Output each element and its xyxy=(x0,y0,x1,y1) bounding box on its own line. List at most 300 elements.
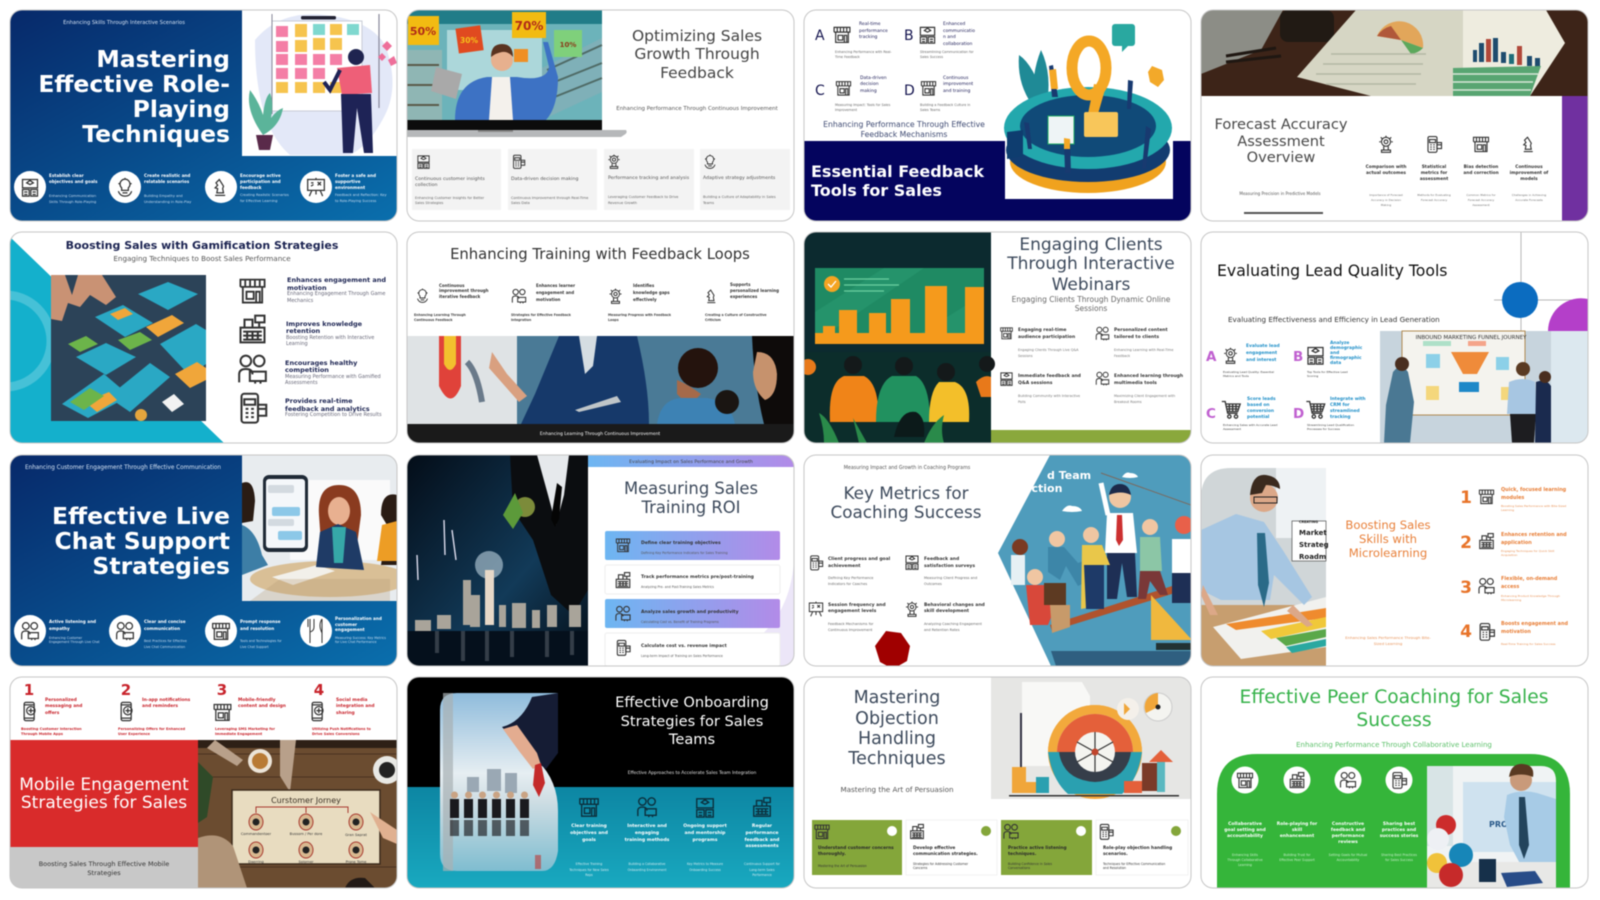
numbered feature row: and reminders xyxy=(142,703,178,709)
caption band: Enhancing Learning Through Continuous Improvement xyxy=(540,431,660,437)
title: Strategies for Sales xyxy=(21,793,187,813)
feature grid: Analyzing Coaching Engagement xyxy=(924,622,983,626)
panel: Effective Onboarding Strategies for Sales Teams xyxy=(407,677,794,888)
feature row: Clear and concise xyxy=(144,619,186,624)
feature columns: training methods xyxy=(625,837,670,843)
panel: Key Metrics for Coaching Success xyxy=(804,455,1193,669)
subtitle: Enhancing Sales Performance Through Bite- xyxy=(1345,635,1431,640)
feature grid A-D: based on xyxy=(1247,402,1270,408)
feature columns: Long-term Sales xyxy=(749,868,775,872)
title: Optimizing Sales xyxy=(632,27,762,45)
feature list: Enhances engagement and xyxy=(287,276,386,284)
panel: Effective Live Chat Support Strategies xyxy=(10,455,410,666)
photo: customer journey on a table: Bussom / Per dore xyxy=(290,832,323,836)
feature grid A-D: Data-driven xyxy=(860,75,887,81)
feature grid: Enhancing Learning with Real-Time xyxy=(1114,348,1173,352)
numbered feature row: 4 xyxy=(314,681,324,699)
numbered list: 2 xyxy=(1460,533,1472,553)
feature columns: assessments xyxy=(745,843,779,849)
feature grid A-D: Evaluate lead xyxy=(1246,343,1280,349)
illustration: webinar audience and bar chart xyxy=(800,232,995,443)
feature grid: Q&A sessions xyxy=(1018,380,1053,386)
feature row xyxy=(14,615,386,649)
title: Growth Through xyxy=(634,45,760,63)
title: Effective Live xyxy=(52,502,230,530)
title: Tools for Sales xyxy=(811,181,942,200)
illustration: performance gauge xyxy=(991,677,1191,799)
feature columns: Accountability xyxy=(1337,858,1359,862)
feature columns: Role-playing for xyxy=(1277,821,1318,827)
feature columns: for Sales Success xyxy=(1385,858,1413,862)
feature row: Active listening and xyxy=(49,619,96,624)
subtitle: Evaluating Effectiveness and Efficiency in Lead Generation xyxy=(1228,315,1440,324)
feature cards: Teams xyxy=(702,201,714,205)
feature grid A-D: tracking xyxy=(1330,414,1351,420)
panel: Mobile Engagement Strategies for Sales xyxy=(10,677,401,888)
subtitle: Engaging Clients Through Dynamic Online xyxy=(1012,295,1171,304)
feature grid A-D: D xyxy=(904,83,915,99)
feature grid: achievement xyxy=(828,563,861,569)
feature columns: Effective Peer Support xyxy=(1279,858,1316,862)
feature row: Live Chat Support xyxy=(240,645,269,649)
subtitle: Boosting Sales Through Effective Mobile xyxy=(39,860,169,868)
feature columns: metrics for xyxy=(1421,170,1448,176)
subtitle: Enhancing Performance Through Effective xyxy=(823,120,985,129)
feature columns: Bias detection xyxy=(1464,164,1498,170)
numbered list: 4 xyxy=(1460,622,1472,642)
feature cards xyxy=(812,820,1188,875)
title: Evaluating Lead Quality Tools xyxy=(1217,261,1447,280)
feature grid xyxy=(1001,327,1183,404)
title: Playing xyxy=(133,95,230,123)
feature columns: skill xyxy=(1292,827,1303,833)
image: laptop with shop scene: 10% xyxy=(560,41,576,49)
illustration: cheering cartoon team xyxy=(998,455,1193,666)
subtitle: Engaging Techniques to Boost Sales Performance xyxy=(113,254,291,263)
photo: presenter and students xyxy=(407,336,794,424)
feature columns: engaging xyxy=(635,830,659,836)
feature columns: and correction xyxy=(1463,170,1499,176)
subtitle: Effective Approaches to Accelerate Sales Team Integration xyxy=(628,770,756,776)
subtitle: Sessions xyxy=(1075,304,1107,313)
feature row: Enhancing Learning Through xyxy=(414,313,466,317)
title: Through Interactive xyxy=(1006,254,1175,274)
title: Measuring Sales xyxy=(624,479,758,498)
feature row: Understanding in Role-Play xyxy=(144,200,191,204)
photo: businessman above city skyline xyxy=(407,455,588,666)
feature cards: Continuous customer insights xyxy=(415,176,485,182)
title: Skills with xyxy=(1359,532,1417,546)
feature grid A-D: potential xyxy=(1247,414,1270,420)
feature row: Foster a safe and xyxy=(335,173,376,178)
feature cards: scenarios. xyxy=(1103,851,1128,857)
feature grid A-D: D xyxy=(1293,406,1304,422)
feature grid A-D xyxy=(815,21,975,112)
step list: Define clear training objectives xyxy=(641,540,721,546)
feature row: engagement and xyxy=(536,290,574,295)
photo: gamification board tiles xyxy=(51,275,206,421)
panel: Boosting Sales Skills with Microlearning xyxy=(1201,455,1588,666)
feature grid A-D: Time Feedback xyxy=(834,55,860,59)
feature grid: Polls xyxy=(1018,400,1026,404)
numbered list: Flexible, on-demand xyxy=(1501,576,1558,582)
feature row: relatable scenarios xyxy=(144,179,190,184)
feature columns xyxy=(568,798,781,877)
numbered feature row: 1 xyxy=(24,681,34,699)
feature row: Strategies for Effective Feedback xyxy=(511,313,572,317)
feature row: Measuring Success: Key Metrics xyxy=(335,636,386,640)
subtitle: Strategies xyxy=(87,869,121,877)
feature columns: Sharing best xyxy=(1383,821,1416,827)
feature row: participation and xyxy=(240,179,281,184)
feature grid: and Retention Rates xyxy=(924,628,960,632)
feature row: Best Practices for Effective xyxy=(144,639,187,643)
feature cards: Building Confidence in Sales xyxy=(1008,862,1052,866)
title: Strategies xyxy=(92,552,230,580)
feature columns: Common Metrics for xyxy=(1466,193,1496,197)
subtitle: Measuring Impact and Growth in Coaching Programs xyxy=(844,465,971,471)
feature list: Measuring Performance with Gamified xyxy=(285,374,381,380)
feature row: objectives and goals xyxy=(49,179,98,184)
step list: Long-term Impact of Training on Sales Performance xyxy=(641,654,723,658)
subtitle: Sized Learning xyxy=(1374,641,1403,646)
feature row: Creating a Culture of Constructive xyxy=(705,313,767,317)
feature grid A-D: communicatio xyxy=(943,28,975,34)
feature grid A-D: Processes for Success xyxy=(1307,427,1340,431)
feature columns: Methods for Evaluating xyxy=(1417,193,1451,197)
panel: Measuring Sales Training ROI xyxy=(407,455,794,666)
feature list: Learning xyxy=(286,341,308,347)
title: Training ROI xyxy=(640,498,741,517)
image: laptop with shop scene: 30% xyxy=(460,36,478,45)
feature grid: Outcomes xyxy=(924,582,942,586)
feature row: Identifies xyxy=(633,283,655,288)
photo: presenter marking up a roadmap xyxy=(1201,468,1329,666)
feature list: Enhancing Engagement Through Game xyxy=(287,291,386,297)
feature row: Enhancing Communication xyxy=(49,194,96,198)
feature columns: Constructive xyxy=(1332,821,1364,827)
feature cards: Performance tracking and analysis xyxy=(608,175,690,181)
feature row: motivation xyxy=(536,297,561,302)
numbered feature row: messaging and xyxy=(45,703,82,709)
panel: Optimizing Sales Growth Through Feedback xyxy=(407,10,794,221)
title: Objection xyxy=(855,709,939,729)
feature columns xyxy=(1224,766,1419,867)
feature grid A-D: collaboration xyxy=(943,41,972,47)
numbered feature row: integration and xyxy=(336,703,374,709)
feature columns: models xyxy=(1520,176,1538,182)
subtitle: Mastering the Art of Persuasion xyxy=(840,785,954,794)
numbered feature row: Personalizing Offers for Enhanced xyxy=(118,727,186,731)
numbered feature row: Boosting Customer Interaction xyxy=(21,727,82,731)
feature grid: Personalized content xyxy=(1114,327,1168,333)
feature columns: Building Trust for xyxy=(1283,853,1311,857)
feature row: Engagement Through Live Chat xyxy=(49,640,100,644)
numbered list: Acquisition xyxy=(1501,553,1518,557)
feature row: Continuous Feedback xyxy=(414,318,453,322)
feature grid A-D: improvement xyxy=(943,81,973,87)
feature row: Creating Realistic Scenarios xyxy=(240,193,289,197)
feature row: Feedback and Reflection: Key xyxy=(335,193,387,197)
feature row: experiences xyxy=(730,294,758,299)
feature grid A-D: decision xyxy=(860,81,879,87)
numbered list: Learning xyxy=(1501,508,1514,512)
title: Overview xyxy=(1247,149,1315,166)
feature grid A-D: Scoring xyxy=(1307,374,1318,378)
title: Boosting Sales with Gamification Strategies xyxy=(66,239,339,252)
photo: customer journey on a table: Commandentoer xyxy=(241,832,272,836)
feature grid A-D: Measuring Impact: Tools for Sales xyxy=(835,103,891,107)
feature cards: and Resolution xyxy=(1103,866,1126,870)
image: team around a phone chat xyxy=(242,455,410,601)
feature columns: Reps xyxy=(585,873,593,877)
feature columns: Key Metrics to Measure xyxy=(687,862,723,866)
photo: team at marketing funnel whiteboard xyxy=(1380,331,1588,443)
feature cards: Building a Culture of Adaptability in Sales xyxy=(703,195,776,199)
feature columns: Accuracy in Decision xyxy=(1371,198,1401,202)
feature grid A-D: demographic xyxy=(1330,345,1363,351)
subtitle: Measuring Precision in Predictive Models xyxy=(1239,191,1321,196)
feature row: personalized learning xyxy=(730,288,779,293)
feature grid A-D: Real-time xyxy=(859,21,881,27)
panel: Forecast Accuracy Assessment Overview xyxy=(1201,10,1588,221)
feature columns: Comparison with xyxy=(1366,164,1406,170)
photo: presenter marking up a roadmap: Market xyxy=(1299,529,1327,537)
illustration: cheering cartoon team: d Team xyxy=(1047,469,1091,482)
numbered feature row: Mobile-friendly xyxy=(238,697,276,703)
feature grid A-D: making xyxy=(860,88,877,94)
title: Effective Onboarding xyxy=(615,694,769,711)
feature grid A-D: A xyxy=(1206,349,1217,365)
feature cards: Strategies for Addressing Customer xyxy=(913,862,969,866)
subtitle: Enhancing Performance Through Continuous Improvement xyxy=(616,106,779,112)
feature grid A-D: conversion xyxy=(1247,408,1274,414)
feature columns: assessment xyxy=(1420,176,1448,182)
feature columns: performance xyxy=(1332,833,1364,839)
numbered list: Engaging Techniques for Quick Skill xyxy=(1501,549,1554,553)
title: Techniques xyxy=(847,749,946,769)
feature columns: feedback and xyxy=(745,837,779,843)
feature cards: Sales Data xyxy=(511,201,530,205)
step list: Defining Key Performance Indicators for Sales Training xyxy=(641,551,728,555)
feature row: for Live Chat Performance xyxy=(335,640,377,644)
title: Effective Role- xyxy=(38,70,230,98)
feature cards: Leveraging Customer Feedback to Drive xyxy=(608,195,678,199)
feature list: Improves knowledge xyxy=(286,320,363,328)
feature row: Enhancing Customer xyxy=(49,636,83,640)
feature grid: multimedia tools xyxy=(1114,380,1157,386)
feature cards: Data-driven decision making xyxy=(511,176,578,182)
feature row: Enhances learner xyxy=(536,283,575,288)
feature grid: Feedback Mechanisms for xyxy=(828,622,874,626)
feature columns: Clear training xyxy=(571,823,607,829)
title: Enhancing Training with Feedback Loops xyxy=(450,246,750,263)
panel: Boosting Sales with Gamification Strategies xyxy=(0,232,397,443)
feature list: retention xyxy=(286,327,321,335)
title: Effective Peer Coaching for Sales xyxy=(1240,687,1548,708)
feature list: feedback and analytics xyxy=(285,405,370,413)
feature grid A-D: n and xyxy=(943,34,956,40)
numbered feature row: Leveraging SMS Marketing for xyxy=(215,727,275,731)
numbered list xyxy=(1460,487,1568,646)
photo: presenter marking up a roadmap: CREATING xyxy=(1299,520,1318,524)
feature row: Create realistic and xyxy=(144,173,190,178)
feature row: iterative feedback xyxy=(439,294,481,299)
numbered list: Enhances retention and xyxy=(1501,532,1567,538)
feature cards: Sales Strategies xyxy=(415,201,443,205)
feature cards: Practice active listening xyxy=(1008,845,1067,851)
feature list: Boosting Retention with Interactive xyxy=(286,335,374,341)
photo: customer journey on a table: Daerring xyxy=(248,860,264,864)
feature grid: Behavioral changes and xyxy=(924,602,985,608)
feature grid: Engaging Clients Through Live Q&A xyxy=(1018,348,1079,352)
feature grid: Breakout Rooms xyxy=(1114,400,1142,404)
numbered list: Quick, focused learning xyxy=(1501,487,1567,493)
feature grid A-D: and training xyxy=(943,88,970,94)
feature cards: Continuous Improvement through Real-Time xyxy=(511,196,588,200)
title: Techniques xyxy=(82,120,230,148)
subtitle: Enhancing Skills Through Interactive Scenarios xyxy=(63,20,185,26)
numbered feature row: Immediate Engagement xyxy=(215,732,262,736)
feature cards: techniques. xyxy=(1008,851,1037,857)
feature row: supportive xyxy=(335,179,361,184)
title: Handling xyxy=(858,729,936,749)
panel: Engaging Clients Through Interactive Webinars xyxy=(800,232,1191,443)
feature row: empathy xyxy=(49,626,70,631)
feature columns: objectives and xyxy=(570,830,608,836)
feature grid: Session frequency and xyxy=(828,602,886,608)
feature row: Loops xyxy=(608,318,619,322)
image: laptop with shop scene: 70% xyxy=(515,19,543,33)
feature cards: collection xyxy=(415,182,438,188)
feature grid: Measuring Client Progress and xyxy=(924,576,977,580)
feature cards: Enhancing Customer Insights for Better xyxy=(415,196,485,200)
feature grid A-D: Score leads xyxy=(1247,396,1276,402)
photo: hand choosing a figure xyxy=(440,693,558,871)
feature columns: programs xyxy=(693,837,718,843)
numbered list: application xyxy=(1501,540,1532,546)
step list: Calculate cost vs. revenue impact xyxy=(641,643,728,649)
feature cards: Conversations xyxy=(1008,866,1030,870)
numbered list: 3 xyxy=(1460,578,1472,598)
feature grid A-D: and xyxy=(1330,350,1339,356)
feature columns: Learning xyxy=(1238,863,1252,867)
title: Forecast Accuracy xyxy=(1214,116,1348,133)
feature list: Mechanics xyxy=(287,298,314,304)
feature list: Provides real-time xyxy=(285,397,353,405)
feature row xyxy=(14,171,387,204)
feature columns: Building a Collaborative xyxy=(629,862,666,866)
icon: red heptagon xyxy=(875,631,910,669)
feature row: to Role-Playing Success xyxy=(335,199,377,203)
feature grid: Maximizing Client Engagement with xyxy=(1114,394,1175,398)
feature grid A-D: B xyxy=(1293,349,1303,365)
title: Microlearning xyxy=(1349,546,1427,560)
feature columns: success stories xyxy=(1380,833,1419,839)
feature grid A-D: Continuous xyxy=(943,75,969,81)
feature row: Tools and Technologies for xyxy=(239,639,282,643)
feature grid: Feedback and xyxy=(924,556,959,562)
subtitle: Enhancing Customer Engagement Through Effective Communication xyxy=(25,465,221,471)
feature grid A-D: Streamlining Communication for xyxy=(920,50,974,54)
panel: Evaluating Lead Quality Tools xyxy=(1201,232,1588,443)
feature columns: Continuous xyxy=(1515,164,1543,170)
numbered list: access xyxy=(1501,584,1519,590)
feature columns: Regular xyxy=(752,823,773,829)
title: Key Metrics for xyxy=(843,483,969,503)
feature row: Integration xyxy=(511,318,532,322)
photo: presenter marking up a roadmap: Strateg xyxy=(1299,541,1329,549)
feature grid: tailored to clients xyxy=(1114,334,1159,340)
feature row: Skills Through Role-Playing xyxy=(49,200,96,204)
numbered feature row: Social media xyxy=(336,697,367,703)
top band xyxy=(588,455,794,467)
photo: customer journey on a table xyxy=(198,740,401,888)
title: Success xyxy=(1356,710,1432,731)
feature row: Criticism xyxy=(705,318,721,322)
numbered feature row: User Experience xyxy=(118,732,151,736)
feature grid A-D: Enhancing Sales with Accurate Lead xyxy=(1223,423,1277,427)
feature columns: Onboarding Success xyxy=(689,868,721,872)
caption band xyxy=(407,424,794,443)
feature columns: performance xyxy=(745,830,779,836)
title: Feedback xyxy=(660,64,734,82)
feature grid: engagement levels xyxy=(828,608,877,614)
feature row: feedback xyxy=(240,185,262,190)
title: Mastering xyxy=(96,45,230,73)
feature columns: Making xyxy=(1381,203,1391,207)
feature grid A-D xyxy=(1206,340,1366,431)
numbered feature row: sharing xyxy=(336,710,355,716)
feature grid: Immediate feedback and xyxy=(1018,373,1081,379)
feature columns: Setting Goals for Mutual xyxy=(1329,853,1367,857)
illustration: cheering cartoon team: ection xyxy=(1024,482,1062,495)
feature grid A-D: Sales Success xyxy=(920,55,943,59)
decorative geometry xyxy=(1494,232,1588,332)
feature row: improvement through xyxy=(439,288,489,293)
feature grid: Engaging real-time xyxy=(1018,327,1066,333)
feature columns: Assessment xyxy=(1472,203,1491,207)
feature row: environment xyxy=(335,185,365,190)
feature row xyxy=(414,282,779,322)
image: laptop with shop scene: 50% xyxy=(410,25,436,38)
feature columns: Accurate Forecasts xyxy=(1515,198,1543,202)
feature columns: reviews xyxy=(1338,839,1358,845)
feature row: Supports xyxy=(730,282,751,287)
feature grid: Defining Key Performance xyxy=(828,576,873,580)
numbered list: Enhancing Product Knowledge Through xyxy=(1501,594,1560,598)
feature grid A-D: engagement xyxy=(1246,350,1277,356)
panel: Mastering Effective Role-Playing Techniques xyxy=(10,10,397,221)
feature grid A-D: Metrics and Tools xyxy=(1223,374,1249,378)
numbered feature row: Personalized xyxy=(45,697,77,703)
feature columns: goal setting and xyxy=(1224,827,1266,833)
title: Chat Support xyxy=(54,527,230,555)
feature grid A-D: Top Tools for Effective Lead xyxy=(1306,370,1348,374)
feature cards: Role-play objection handling xyxy=(1103,845,1172,851)
title: Strategies for Sales xyxy=(621,713,763,730)
feature columns: Interactive and xyxy=(627,823,667,829)
numbered list: Microlearning xyxy=(1501,598,1521,602)
feature cards: Adaptive strategy adjustments xyxy=(703,175,776,181)
feature columns: Through Collaborative xyxy=(1226,858,1263,862)
feature row: Prompt response xyxy=(240,619,281,624)
feature columns: Performance xyxy=(752,873,772,877)
feature row: Establish clear xyxy=(49,173,85,178)
feature grid xyxy=(809,556,985,632)
feature grid: Building Community with Interactive xyxy=(1018,394,1080,398)
feature row: knowledge gaps xyxy=(633,290,670,295)
